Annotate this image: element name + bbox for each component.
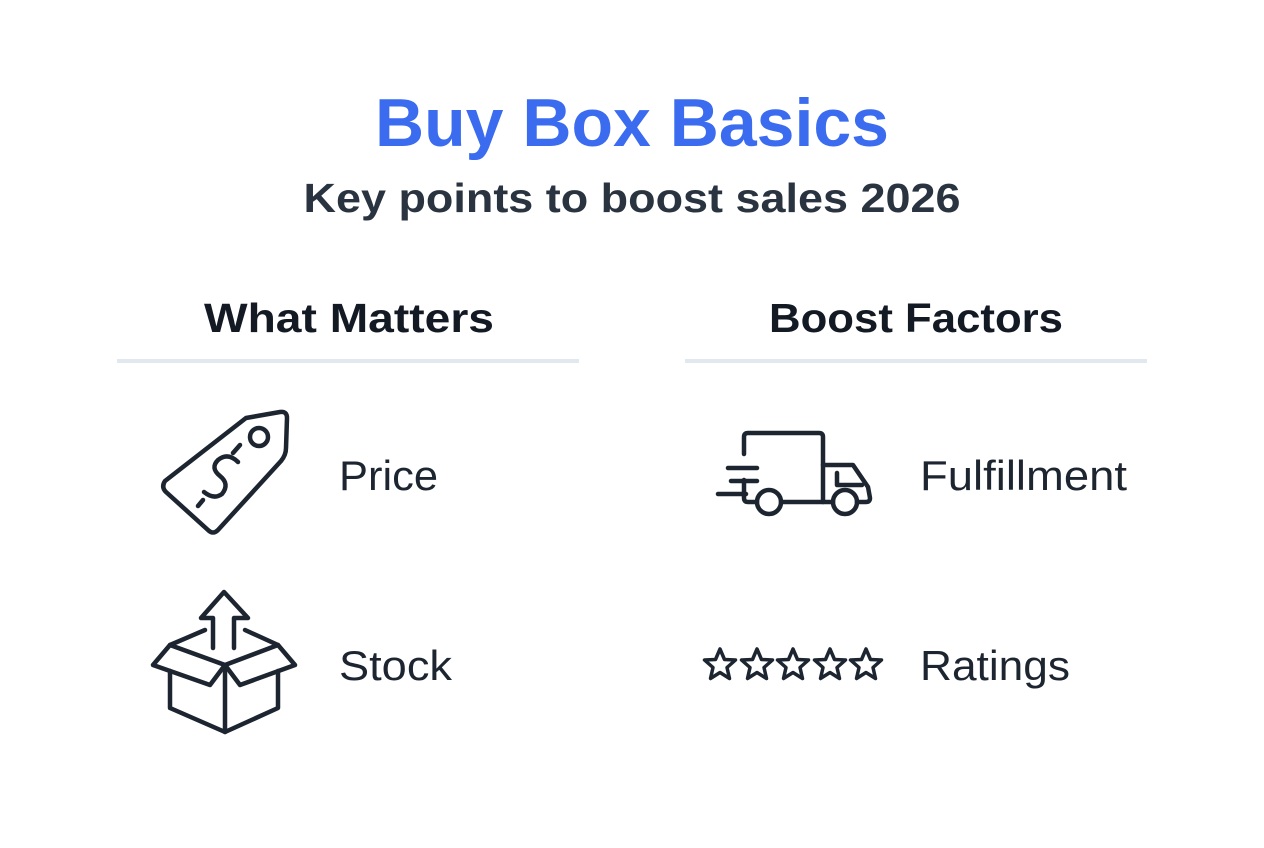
title: Buy Box Basics (375, 85, 889, 161)
heading: boost factors: Boost Factors (769, 295, 1063, 341)
label: price: Price (339, 452, 438, 499)
label: ratings: Ratings (920, 642, 1070, 689)
icon: five stars (704, 649, 882, 678)
panel: what matters (117, 295, 579, 732)
subtitle: Key points to boost sales 2026 (304, 175, 960, 221)
icon: price tag (163, 412, 287, 532)
label: stock: Stock (339, 642, 453, 689)
heading: what matters: What Matters (204, 295, 494, 341)
icon: truck (718, 433, 870, 514)
panel: boost factors (685, 295, 1147, 689)
icon: box with arrow (153, 592, 295, 732)
label: fulfillment: Fulfillment (920, 452, 1127, 499)
